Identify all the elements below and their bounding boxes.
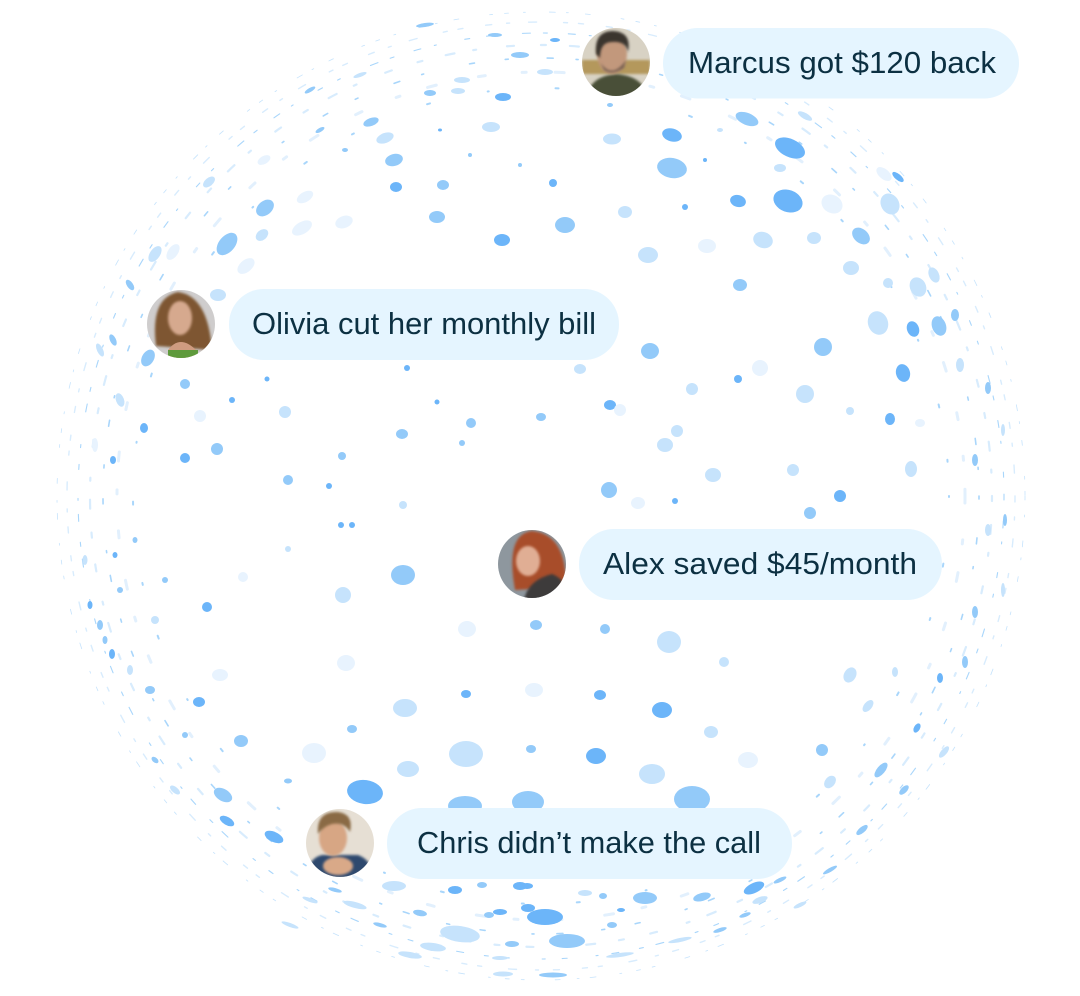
top dots (146, 22, 873, 277)
bubble: Marcus got $120 back (663, 28, 1019, 98)
bottom dots (281, 864, 838, 978)
right side dots (641, 164, 1007, 837)
bubble: Olivia cut her monthly bill: Olivia cut her monthly bill (252, 306, 596, 341)
bubble: Olivia cut her monthly bill (229, 289, 619, 360)
bubble: Alex saved $45/month (579, 529, 942, 600)
avatar: Olivia (147, 290, 215, 360)
centre dots (110, 364, 925, 816)
bubble: Alex saved $45/month: Alex saved $45/month (603, 546, 917, 581)
left side dots (82, 278, 890, 846)
avatar: Chris (306, 809, 374, 878)
bubble: Chris didn't make the call (387, 808, 792, 879)
bubble: Marcus got $120 back: Marcus got $120 back (688, 45, 996, 80)
avatar: Marcus (582, 28, 650, 98)
bubble: Chris didn't make the call: Chris didn’t make the call (417, 825, 761, 860)
avatar: Alex (498, 530, 568, 600)
